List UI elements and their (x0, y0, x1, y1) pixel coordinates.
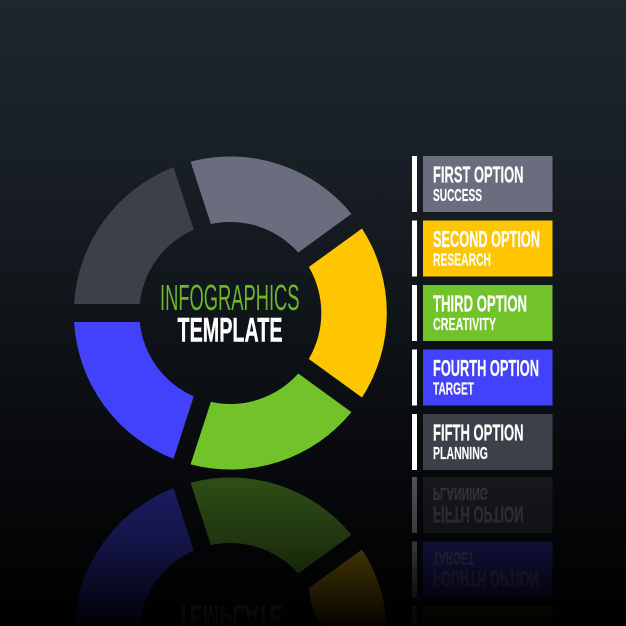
segment: third option green (191, 374, 351, 470)
option 4: FOURTH OPTION (433, 355, 539, 381)
options reflection: TARGET (433, 548, 474, 568)
segment: second option yellow (309, 228, 387, 398)
segment: fourth option blue (74, 322, 194, 459)
title line: infographics: INFOGRAPHICS (160, 277, 300, 318)
segment: first option grey (191, 156, 351, 252)
option 3 (412, 285, 552, 341)
title (160, 277, 300, 350)
options reflection: PLANNING (433, 484, 488, 504)
option 4: TARGET (433, 378, 474, 398)
option 5 (412, 414, 552, 470)
donut chart (74, 156, 387, 470)
option 3: CREATIVITY (433, 314, 496, 334)
option 5: FIFTH OPTION (433, 420, 524, 446)
option 2 (412, 220, 552, 276)
option 3: THIRD OPTION (433, 290, 527, 316)
options reflection (412, 477, 552, 626)
option 1 (412, 156, 552, 212)
options list (412, 156, 552, 470)
option 1: SUCCESS (433, 185, 482, 205)
option 5: PLANNING (433, 443, 488, 463)
option 2: SECOND OPTION (433, 226, 540, 252)
option 2: RESEARCH (433, 250, 491, 270)
option 1: FIRST OPTION (433, 162, 524, 188)
option 4 (412, 350, 552, 406)
options reflection: FOURTH OPTION (433, 566, 539, 592)
title line: template: TEMPLATE (178, 312, 282, 350)
donut reflection (74, 477, 387, 626)
options reflection: FIFTH OPTION (433, 502, 524, 528)
segment: fifth option dark grey (74, 167, 194, 304)
